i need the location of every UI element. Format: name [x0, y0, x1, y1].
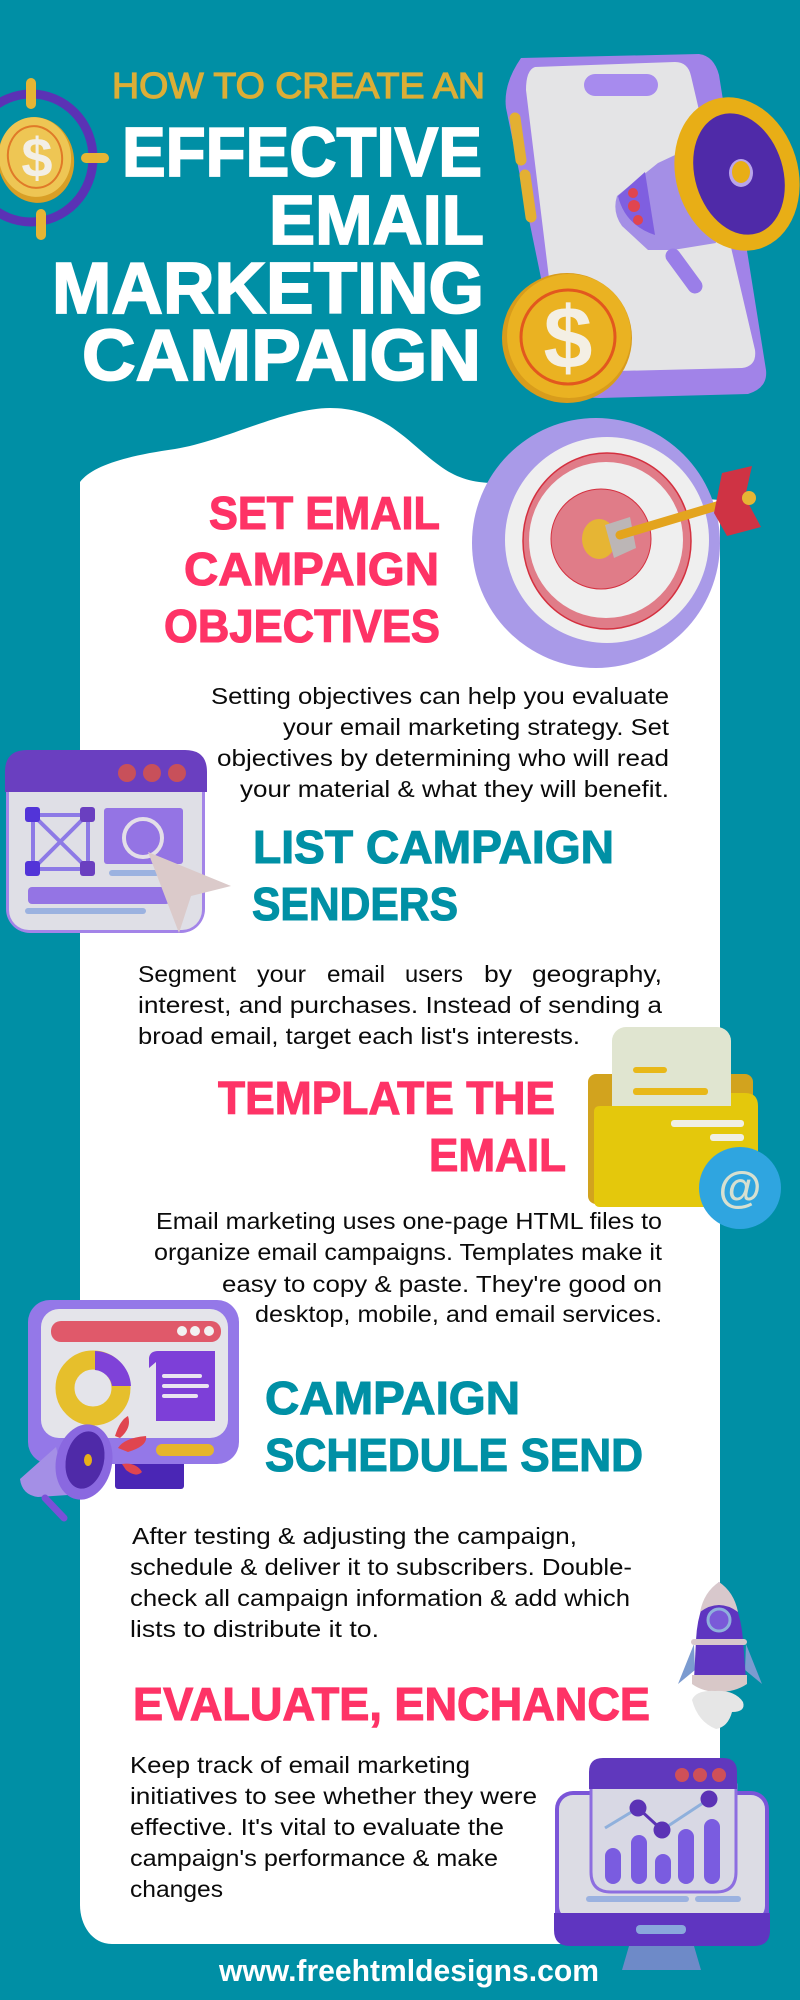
icon: design window with cursor: [5, 750, 231, 933]
section 2 body text: broad email, target each list's interests.: [138, 1023, 580, 1049]
phone notch: [584, 74, 658, 96]
icon: smartphone with megaphone and coin: [502, 54, 800, 403]
section 4 body text: check all campaign information & add which: [130, 1585, 630, 1611]
section 2 body text: [138, 961, 662, 1049]
section 5 body text: campaign's performance & make: [130, 1845, 498, 1871]
section 2 body text: interest, and purchases. Instead of sending a: [138, 992, 662, 1018]
section 4 body text: After testing & adjusting the campaign,: [132, 1523, 577, 1549]
dollar coin: [502, 273, 632, 403]
section 2 body text: your: [257, 961, 306, 987]
section 5 body text: effective. It's vital to evaluate the: [130, 1814, 504, 1840]
section 1 body text: your material & what they will benefit.: [240, 776, 669, 802]
section 5 body text: [130, 1752, 537, 1902]
phone side buttons: [515, 118, 531, 217]
title line: marketing: MARKETING: [52, 249, 484, 329]
section 3 heading: EMAIL: [429, 1129, 566, 1181]
icon: coin in target ring: $: [21, 126, 53, 189]
section 4 body text: schedule & deliver it to subscribers. Double-: [130, 1554, 632, 1580]
dollar coin: $: [544, 288, 592, 387]
section 3 body text: easy to copy & paste. They're good on: [222, 1271, 662, 1297]
section 2 body text: email: [327, 961, 385, 987]
title line: email: EMAIL: [269, 181, 484, 259]
section 3 body text: Email marketing uses one-page HTML files to: [156, 1208, 662, 1234]
section 1 body text: your email marketing strategy. Set: [283, 714, 670, 740]
title: [52, 65, 485, 396]
section 1 heading: OBJECTIVES: [164, 600, 440, 652]
section 5 heading: EVALUATE, ENCHANCE: [133, 1678, 650, 1730]
section 2 body text: users: [405, 961, 463, 987]
section 3 heading: [218, 1072, 566, 1181]
icon: rocket: [678, 1582, 762, 1729]
title kicker: HOW TO CREATE AN: [112, 65, 485, 106]
section 2 heading: LIST CAMPAIGN: [253, 821, 614, 873]
title line: campaign: CAMPAIGN: [82, 316, 481, 396]
section 1 body text: objectives by determining who will read: [217, 745, 669, 771]
section 5 body text: initiatives to see whether they were: [130, 1783, 537, 1809]
section 3 heading: TEMPLATE THE: [218, 1072, 555, 1124]
phone body: [506, 54, 766, 398]
section 3 body text: organize email campaigns. Templates make it: [154, 1239, 663, 1265]
icon: dashboard with megaphone: [20, 1300, 239, 1518]
section 4 body text: [130, 1523, 632, 1642]
section 2 body text: Segment: [138, 961, 237, 987]
section 1 heading: CAMPAIGN: [184, 543, 439, 595]
section 4 heading: CAMPAIGN: [265, 1372, 520, 1424]
section 3 body text: [154, 1208, 663, 1327]
section 5 body text: changes: [130, 1876, 223, 1902]
white content panel: [80, 408, 720, 1944]
section 1 heading: [164, 487, 440, 652]
icon: target with arrow: [472, 418, 761, 668]
icon: folder with email badge: @: [719, 1163, 761, 1212]
section 1 body text: Setting objectives can help you evaluate: [211, 683, 669, 709]
section 4 heading: [265, 1372, 643, 1481]
section 4 body text: lists to distribute it to.: [130, 1616, 379, 1642]
title line: effective: EFFECTIVE: [122, 113, 482, 191]
megaphone: [615, 82, 800, 286]
phone screen: [526, 62, 755, 372]
section 4 heading: SCHEDULE SEND: [265, 1429, 643, 1481]
footer website address: www.freehtmldesigns.com: [218, 1953, 599, 1988]
section 2 heading: SENDERS: [252, 878, 458, 930]
section 2 body text: by: [484, 961, 513, 987]
section 3 body text: desktop, mobile, and email services.: [255, 1301, 662, 1327]
small megaphone: [20, 1416, 146, 1518]
section 1 heading: SET EMAIL: [209, 487, 440, 539]
section 5 body text: Keep track of email marketing: [130, 1752, 470, 1778]
section 2 body text: geography,: [532, 961, 662, 987]
section 1 body text: [211, 683, 670, 802]
section 2 heading: [252, 821, 614, 930]
icon: coin in target ring: [0, 83, 104, 235]
icon: monitor with analytics chart: [554, 1758, 770, 1970]
icon: folder with email badge: [588, 1027, 781, 1229]
